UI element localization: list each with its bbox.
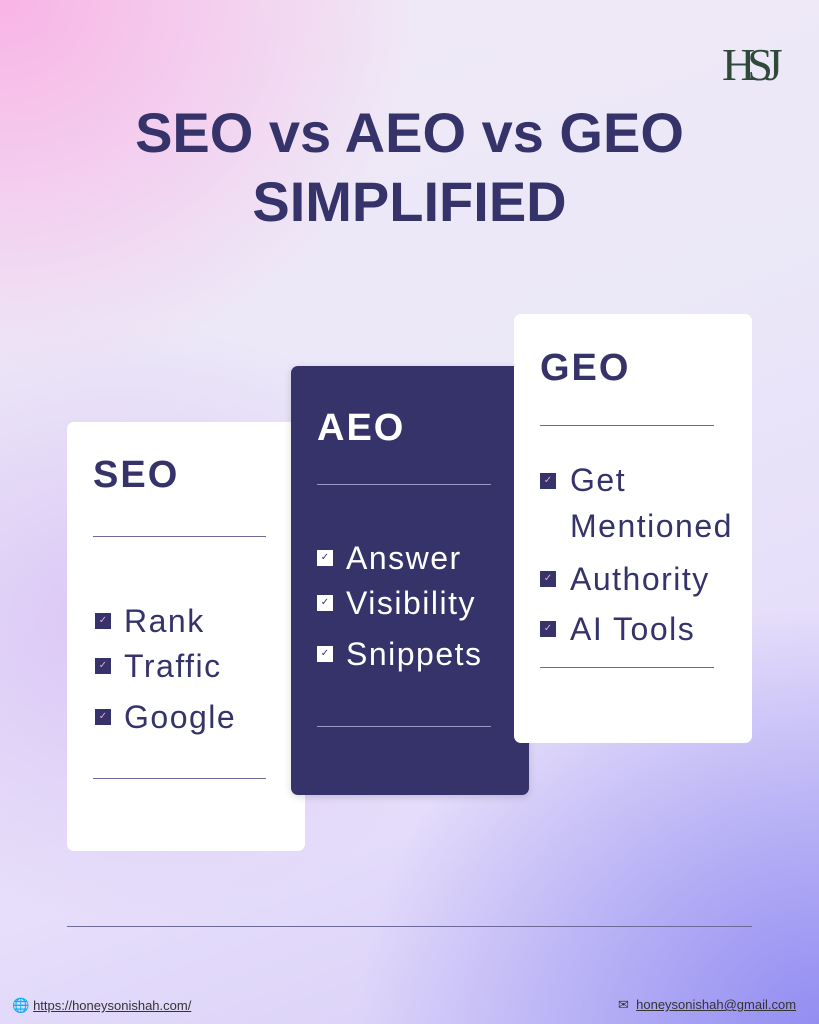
panel: GEO: ✓ [544, 573, 552, 584]
panel: AEO: Snippets [346, 636, 483, 672]
item: Rank [95, 603, 205, 639]
item: Answer [317, 540, 462, 576]
item: AI Tools [540, 611, 695, 647]
footer: website: 🌐 https://honeysonishah.com/ [12, 997, 191, 1013]
item: Snippets [317, 636, 483, 672]
panel: GEO: Get [570, 462, 626, 498]
panel: GEO [514, 314, 752, 743]
panel: SEO: Google [124, 699, 236, 735]
logo: HSJ [722, 39, 775, 90]
item: Google [95, 699, 236, 735]
footer: email: ✉ honeysonishah@gmail.com [618, 997, 796, 1012]
title [135, 101, 684, 233]
panel: GEO: AI Tools [570, 611, 695, 647]
panel: GEO: Mentioned [570, 508, 733, 544]
heading: SEO: SEO [93, 454, 179, 496]
panel: AEO: Visibility [346, 585, 476, 621]
panel: SEO: Traffic [124, 648, 222, 684]
panel: SEO: ✓ [99, 660, 107, 671]
item: Get Mentioned [540, 462, 733, 544]
panel: SEO [67, 422, 305, 851]
panel: AEO [291, 366, 529, 795]
item: Authority [540, 561, 710, 597]
title: SIMPLIFIED [252, 170, 567, 233]
panel: AEO: Answer [346, 540, 462, 576]
item: Visibility [317, 585, 476, 621]
heading: GEO: GEO [540, 347, 630, 389]
item: Traffic [95, 648, 222, 684]
panel: SEO: ✓ [99, 615, 107, 626]
panel: GEO: ✓ [544, 475, 552, 486]
panel: SEO: ✓ [99, 711, 107, 722]
panel: SEO: Rank [124, 603, 205, 639]
panel: GEO: ✓ [544, 623, 552, 634]
panel: AEO: ✓ [321, 648, 329, 659]
title: SEO vs AEO vs GEO [135, 101, 684, 164]
panel: AEO: ✓ [321, 597, 329, 608]
panel: GEO: Authority [570, 561, 710, 597]
heading: AEO: AEO [317, 407, 405, 449]
panel: AEO: ✓ [321, 552, 329, 563]
